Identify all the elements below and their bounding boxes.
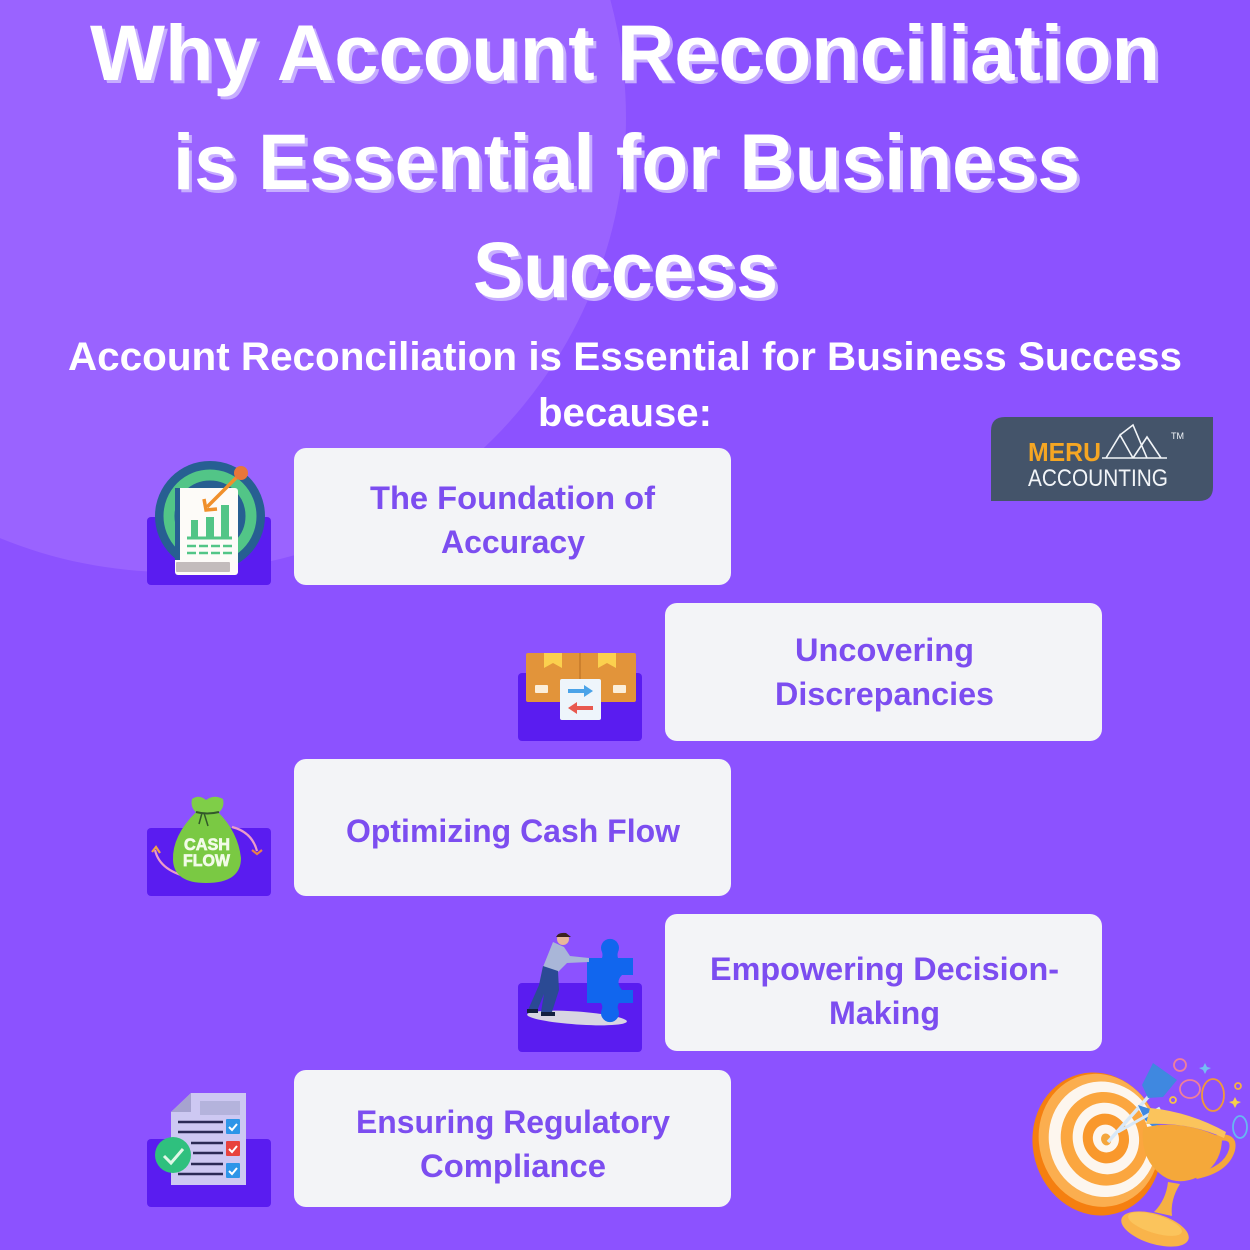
- illustration: target, dart and trophy: [1017, 1058, 1247, 1250]
- icon: person pushing puzzle piece: [518, 933, 642, 1052]
- title: [90, 8, 1160, 314]
- confetti doodles: [1170, 1059, 1247, 1138]
- card: Uncovering: [795, 632, 974, 668]
- title: Success: [473, 225, 778, 314]
- subtitle: because:: [538, 391, 712, 435]
- card: [665, 603, 1102, 741]
- item 5: Ensuring Regulatory Compliance: [147, 1070, 731, 1207]
- icon: cash flow money bag: CASH: [184, 836, 230, 854]
- logo: Meru Accounting: MERU: [1028, 437, 1101, 467]
- logo: Meru Accounting: [991, 417, 1213, 501]
- logo: Meru Accounting: ACCOUNTING: [1028, 465, 1168, 492]
- title: is Essential for Business: [173, 117, 1080, 206]
- card: Discrepancies: [775, 676, 994, 712]
- card: [294, 759, 731, 896]
- icon: cash flow money bag: FLOW: [183, 852, 230, 870]
- icon: cash flow money bag: [147, 797, 271, 896]
- card: [294, 1070, 731, 1207]
- logo: Meru Accounting: TM: [1171, 431, 1184, 441]
- card: Making: [829, 995, 940, 1031]
- item 3: Optimizing Cash Flow: [147, 759, 731, 896]
- title: Why Account Reconciliation: [90, 8, 1160, 97]
- card: Optimizing Cash Flow: [346, 813, 680, 849]
- subtitle: [68, 335, 1182, 435]
- card: [294, 448, 731, 585]
- dart: [1108, 1063, 1177, 1142]
- trophy: [1117, 1108, 1233, 1250]
- card: Compliance: [420, 1148, 606, 1184]
- item 2: Uncovering Discrepancies: [518, 603, 1102, 741]
- card: [665, 914, 1102, 1051]
- item 4: Empowering Decision-Making: [518, 914, 1102, 1052]
- item 1: The Foundation of Accuracy: [147, 448, 731, 585]
- card: Empowering Decision-: [710, 951, 1059, 987]
- target: [1017, 1058, 1177, 1230]
- icon: compliance checklist: [147, 1093, 271, 1207]
- card: The Foundation of: [370, 480, 655, 516]
- icon: boxes with exchange arrows: [518, 653, 642, 741]
- card: Ensuring Regulatory: [356, 1104, 670, 1140]
- subtitle: Account Reconciliation is Essential for Business Success: [68, 335, 1182, 379]
- card: Accuracy: [441, 524, 585, 560]
- icon: report with target: [147, 461, 271, 585]
